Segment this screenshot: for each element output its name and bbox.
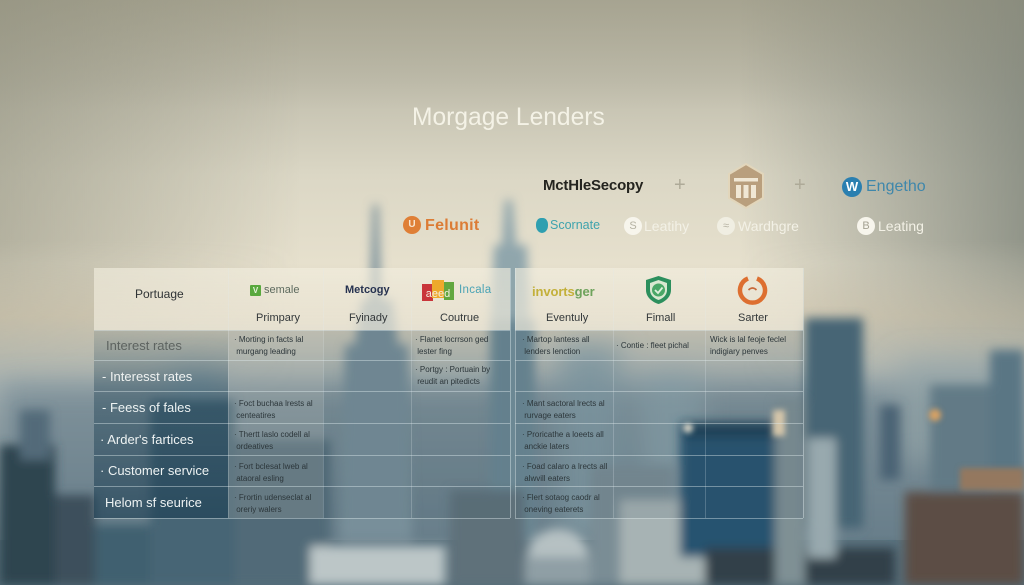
cell text: · Proricathe a loeets all	[522, 430, 604, 439]
logo: Incala: aeed	[426, 288, 450, 300]
column headings	[256, 312, 768, 324]
cell text: lester fing	[417, 346, 452, 356]
comparison table	[94, 268, 804, 519]
table panel fills	[94, 268, 803, 518]
cell text: · Morting in facts lal	[234, 335, 303, 344]
cell text: column Primary	[234, 335, 313, 514]
row label: Feess of fales: - Feess of fales	[102, 400, 191, 415]
cell text	[522, 462, 607, 482]
cell text	[234, 462, 308, 482]
cell text: column Sarter: Wick is lal feoje feclel	[710, 335, 786, 344]
row labels	[100, 338, 209, 510]
logo row: top lenders	[543, 163, 926, 209]
cell text	[415, 335, 488, 356]
logo: Felunit: U	[408, 219, 416, 230]
cell text	[522, 335, 590, 356]
cell text: murgang leading	[236, 346, 296, 356]
logo: semale: semale	[264, 284, 299, 296]
cell text	[522, 399, 605, 420]
cell text: · Flanet locrrson ged	[415, 335, 488, 344]
column heading: Primpary: Primpary	[256, 312, 300, 324]
column heading: Fimall: Fimall	[646, 312, 675, 324]
cell text	[522, 430, 604, 450]
logo: Leatihy	[624, 217, 689, 235]
logo: Leatihy: S	[629, 220, 637, 232]
row label: Interest rates: Interest rates	[106, 338, 182, 353]
cell text: column Contrue	[415, 335, 490, 386]
cell text: oreriy walers	[236, 504, 282, 514]
cell text	[415, 365, 490, 386]
cell text: ataoral esling	[236, 474, 284, 482]
cell text: alwvill eaters	[524, 474, 570, 482]
cell text: rurvage eaters	[524, 410, 576, 420]
logo: Leatihy: Leatihy	[644, 218, 689, 234]
cell text	[234, 399, 313, 420]
cell text	[522, 493, 600, 514]
logo: invortsger: invortsger	[532, 284, 595, 299]
logo: Scornate: Scornate	[550, 218, 600, 232]
cell text: reudit an pitedicts	[417, 376, 480, 386]
cell text: · Foad calaro a lrects all	[522, 462, 607, 471]
icon: plus: +	[794, 174, 806, 196]
cell text: centeatires	[236, 410, 275, 420]
icon: bank hexagon badge	[728, 163, 764, 209]
logo: Wardhgre: ≈	[723, 220, 729, 232]
cell text	[234, 493, 311, 514]
logo: Engetho: Engetho	[866, 178, 926, 195]
logo: Engetho: W	[846, 179, 858, 194]
cell text: oneving eaterets	[524, 504, 583, 514]
cell text: · Mant sactoral lrects al	[522, 399, 605, 408]
row label: Arder's fartices: · Arder's fartices	[100, 432, 194, 447]
logo: McHleSecopy wordmark: MctHleSecopy	[543, 177, 643, 194]
logo: Leating: B	[862, 220, 870, 232]
icon: plus: +	[674, 174, 686, 196]
cell text	[234, 430, 310, 450]
cell text: column Fimall: · Contie : fleet pichal	[616, 341, 689, 350]
logo: Felunit	[403, 216, 480, 234]
cell text: · Portgy : Portuain by	[415, 365, 490, 374]
title: Morgage Lenders	[412, 104, 605, 131]
logo: Incala: Incala	[459, 284, 492, 296]
cell text: column Sarter	[710, 335, 786, 356]
cell text: column Eventuly	[522, 335, 607, 514]
column heading: Eventuly: Eventuly	[546, 312, 588, 324]
cell text: ordeatives	[236, 442, 273, 450]
cell text: · Thertt laslo codell al	[234, 430, 310, 439]
row label: Customer service: · Customer service	[100, 463, 209, 478]
icon: orange ring	[738, 276, 768, 305]
row label: Interesst rates: - Interesst rates	[102, 369, 192, 384]
row label: Helom sf seurice: Helom sf seurice	[105, 495, 202, 510]
logo: Engetho	[842, 177, 926, 197]
logo: Metcogy: Metcogy	[345, 284, 390, 296]
cell text: lenders lenction	[524, 346, 580, 356]
cell text: column Sarter: indigiary penves	[710, 346, 768, 356]
logo: Wardhgre: Wardhgre	[738, 218, 799, 234]
column heading: Contrue: Coutrue	[440, 312, 479, 324]
cell text	[234, 335, 303, 356]
table heading: Portuage: Portuage	[135, 287, 184, 301]
cell text: · Foct buchaa lrests al	[234, 399, 313, 408]
cell text: · Fort bclesat lweb al	[234, 462, 308, 471]
logo: Felunit: Felunit	[425, 217, 480, 234]
cell text: · Flert sotaog caodr al	[522, 493, 600, 502]
cell text: · Martop lantess all	[522, 335, 590, 344]
logo: semale: V	[253, 286, 258, 295]
column heading: Fyinady: Fyinady	[349, 312, 388, 324]
logo: Leating: Leating	[878, 218, 924, 234]
logo: Incala	[422, 280, 492, 301]
logo: Leating	[857, 217, 924, 235]
cell text: · Frortin udenseclat al	[234, 493, 311, 502]
logo: Wardhgre	[717, 217, 799, 235]
column heading: Sarter: Sarter	[738, 312, 768, 324]
grid lines	[94, 330, 510, 331]
icon: green shield	[646, 276, 671, 304]
cell text: anckie laters	[524, 442, 569, 450]
